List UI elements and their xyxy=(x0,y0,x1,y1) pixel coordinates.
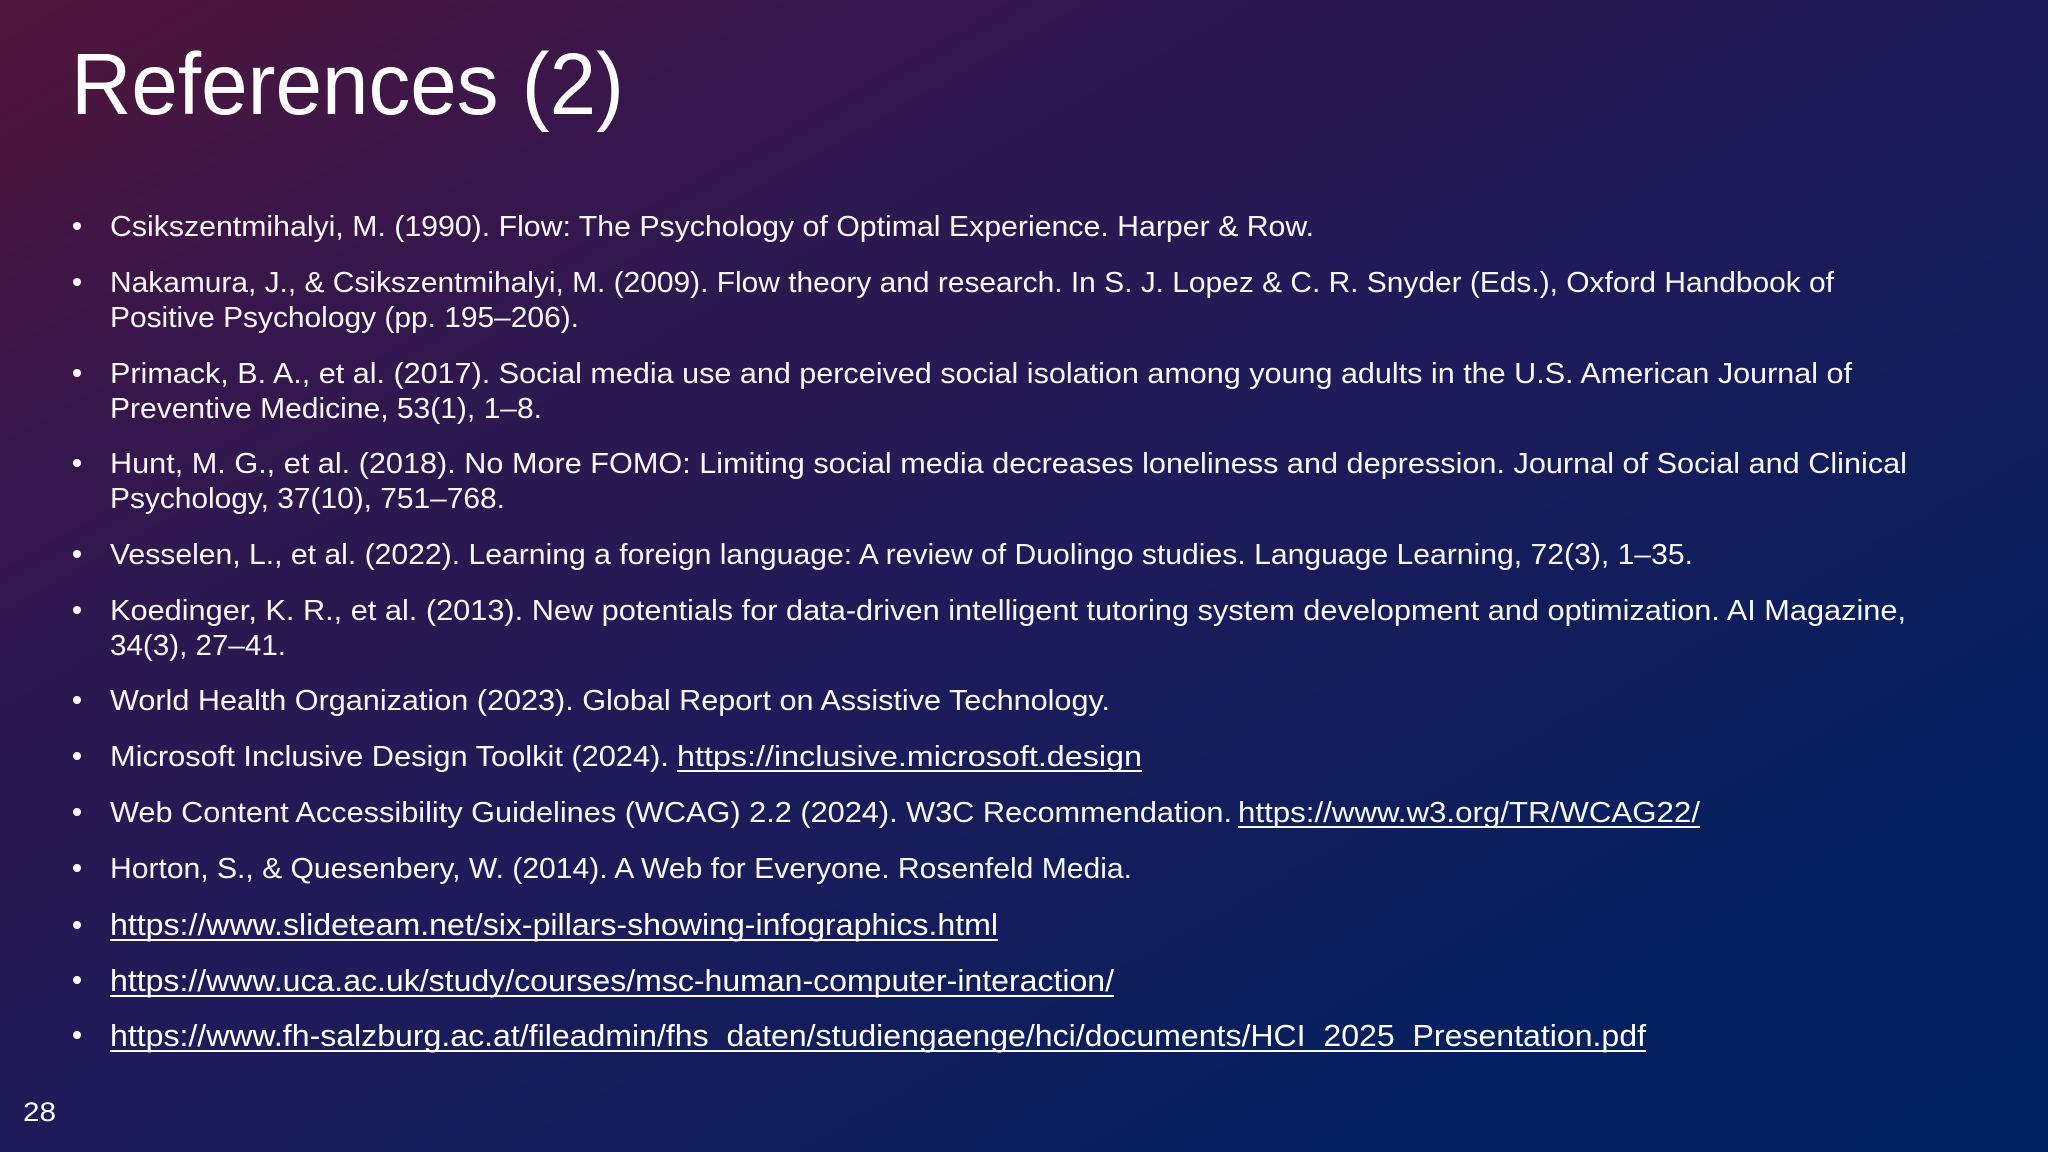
reference: Koedinger 2013 xyxy=(73,595,1906,662)
title: References (2) xyxy=(71,36,624,133)
reference: WCAG 2.2 2024 xyxy=(73,797,1701,829)
reference: Hunt 2018: Psychology, 37(10), 751–768. xyxy=(110,483,505,515)
reference: Horton 2014: Horton, S., & Quesenbery, W. (2014). A Web for Everyone. Rosenfeld Media. xyxy=(110,853,1132,885)
reference: Primack 2017: Primack, B. A., et al. (2017). Social media use and perceived social isolation among young adults in the U.S. American Journal of xyxy=(110,358,1853,390)
reference: Nakamura 2009: Positive Psychology (pp. 195–206). xyxy=(110,302,579,334)
reference: Vesselen 2022: Vesselen, L., et al. (2022). Learning a foreign language: A review of Duolingo studies. Language Learning, 72(3), 1–35. xyxy=(110,539,1693,571)
reference: Hunt 2018 xyxy=(73,448,1907,515)
reference: Microsoft Inclusive Design Toolkit 2024 xyxy=(73,741,1142,773)
slide number: 28 xyxy=(23,1097,56,1127)
reference: Koedinger 2013: 34(3), 27–41. xyxy=(110,630,286,662)
reference: WCAG 2.2 2024: https://www.w3.org/TR/WCAG22/ xyxy=(1238,797,1701,829)
reference: Csikszentmihalyi 1990: Csikszentmihalyi, M. (1990). Flow: The Psychology of Optimal Experience. Harper & Row. xyxy=(110,211,1314,243)
reference: Primack 2017 xyxy=(73,358,1853,425)
reference: Hunt 2018: Hunt, M. G., et al. (2018). No More FOMO: Limiting social media decreases loneliness and depression. Journal of Social and Clinical xyxy=(110,448,1907,480)
reference: Primack 2017: Preventive Medicine, 53(1), 1–8. xyxy=(110,393,542,425)
reference: Nakamura 2009: Nakamura, J., & Csikszentmihalyi, M. (2009). Flow theory and research. In S. J. Lopez & C. R. Snyder (Eds.), Oxford Handbook of xyxy=(110,267,1835,299)
reference: Microsoft Inclusive Design Toolkit 2024: Microsoft Inclusive Design Toolkit (2024). xyxy=(110,741,669,773)
reference: Nakamura 2009 xyxy=(73,267,1835,334)
reference link: slideteam: https://www.slideteam.net/six-pillars-showing-infographics.html xyxy=(110,907,998,942)
reference list xyxy=(73,211,1907,1053)
reference: Koedinger 2013: Koedinger, K. R., et al. (2013). New potentials for data-driven intelligent tutoring system development and optimization. AI Magazine, xyxy=(110,595,1906,627)
reference: Microsoft Inclusive Design Toolkit 2024: https://inclusive.microsoft.design xyxy=(677,741,1142,773)
reference link: uca: https://www.uca.ac.uk/study/courses/msc-human-computer-interaction/ xyxy=(110,963,1114,998)
reference: World Health Organization 2023: World Health Organization (2023). Global Report on Assistive Technology. xyxy=(110,685,1110,717)
reference: WCAG 2.2 2024: Web Content Accessibility Guidelines (WCAG) 2.2 (2024). W3C Recommendation. xyxy=(110,797,1232,829)
reference link: fh-salzburg: https://www.fh-salzburg.ac.at/fileadmin/fhs_daten/studiengaenge/hci/documents/HCI_2025_Presentation.pdf xyxy=(110,1018,1646,1053)
